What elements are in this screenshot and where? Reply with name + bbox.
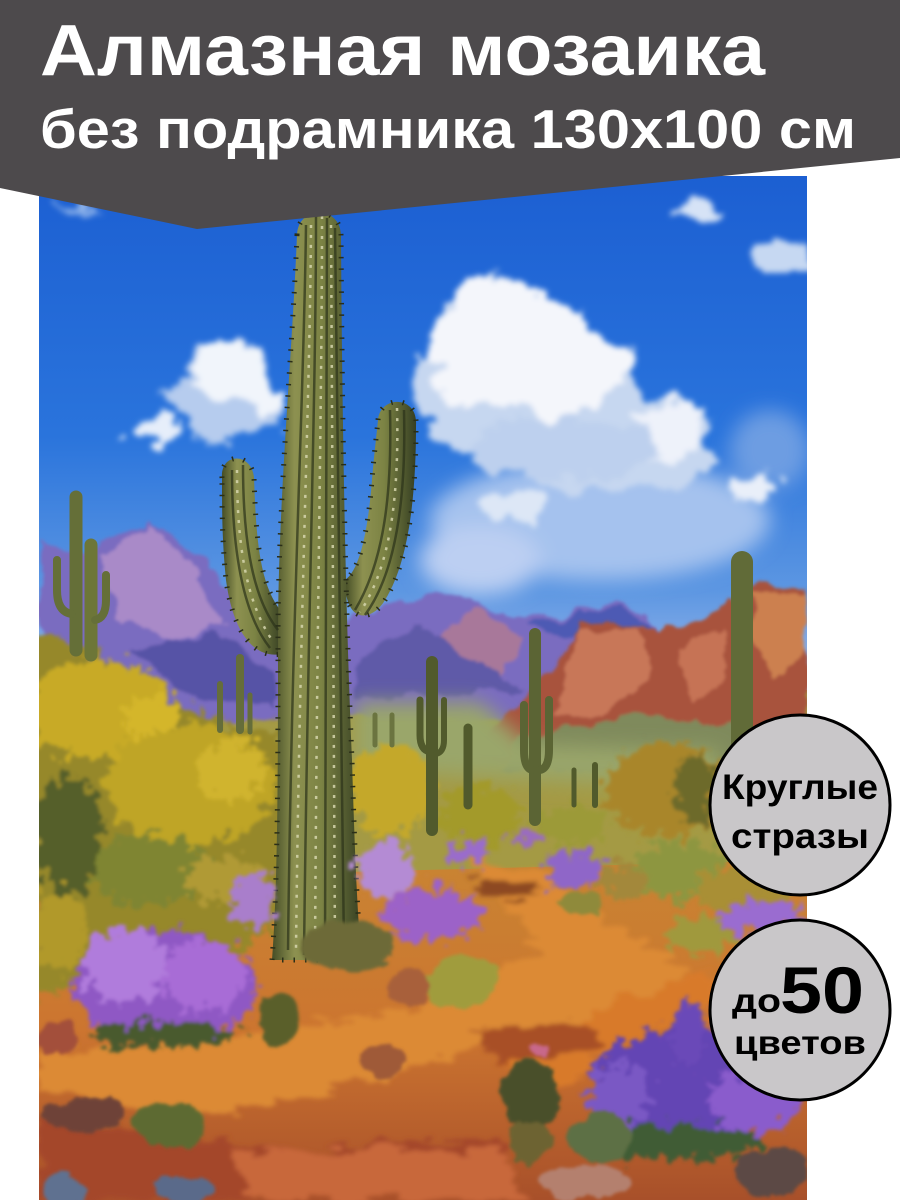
subtitle: без подрамника 130х100 см (40, 98, 856, 160)
grass tufts and rocks (38, 892, 810, 1200)
cactus ribs (232, 216, 404, 955)
title: Алмазная мозаика (40, 11, 766, 91)
red rock mountain (480, 585, 807, 770)
purple lavender bushes (73, 830, 807, 1047)
distant purple mountains (39, 522, 660, 720)
clouds (51, 202, 817, 595)
yellow shrubs left (25, 630, 285, 1000)
valley haze (355, 702, 720, 790)
sky (39, 176, 807, 696)
painting: desert landscape with saguaro cactus (25, 176, 817, 1200)
mid ground backdrop (39, 690, 807, 872)
dirt path (39, 860, 720, 1200)
header banner (0, 0, 900, 229)
main saguaro cactus (222, 212, 416, 960)
small distant saguaros (57, 497, 742, 830)
cactus trunk (272, 212, 362, 960)
cactus spines (237, 216, 397, 955)
mid shrubs (348, 742, 795, 953)
badge: up to 50 colours (710, 920, 890, 1100)
badge: up to 50 colours: 50 (780, 953, 864, 1027)
foreground violet lavender (580, 1003, 803, 1160)
cactus left arm (222, 458, 282, 655)
cactus right arm (345, 402, 416, 616)
badge: round rhinestones (710, 715, 890, 895)
badge: round rhinestones: стразы (731, 817, 869, 856)
ground base (39, 860, 807, 1200)
badge: up to 50 colours: цветов (734, 1024, 866, 1061)
badge: round rhinestones: Круглые (722, 768, 878, 807)
badge: up to 50 colours: до (732, 982, 781, 1019)
